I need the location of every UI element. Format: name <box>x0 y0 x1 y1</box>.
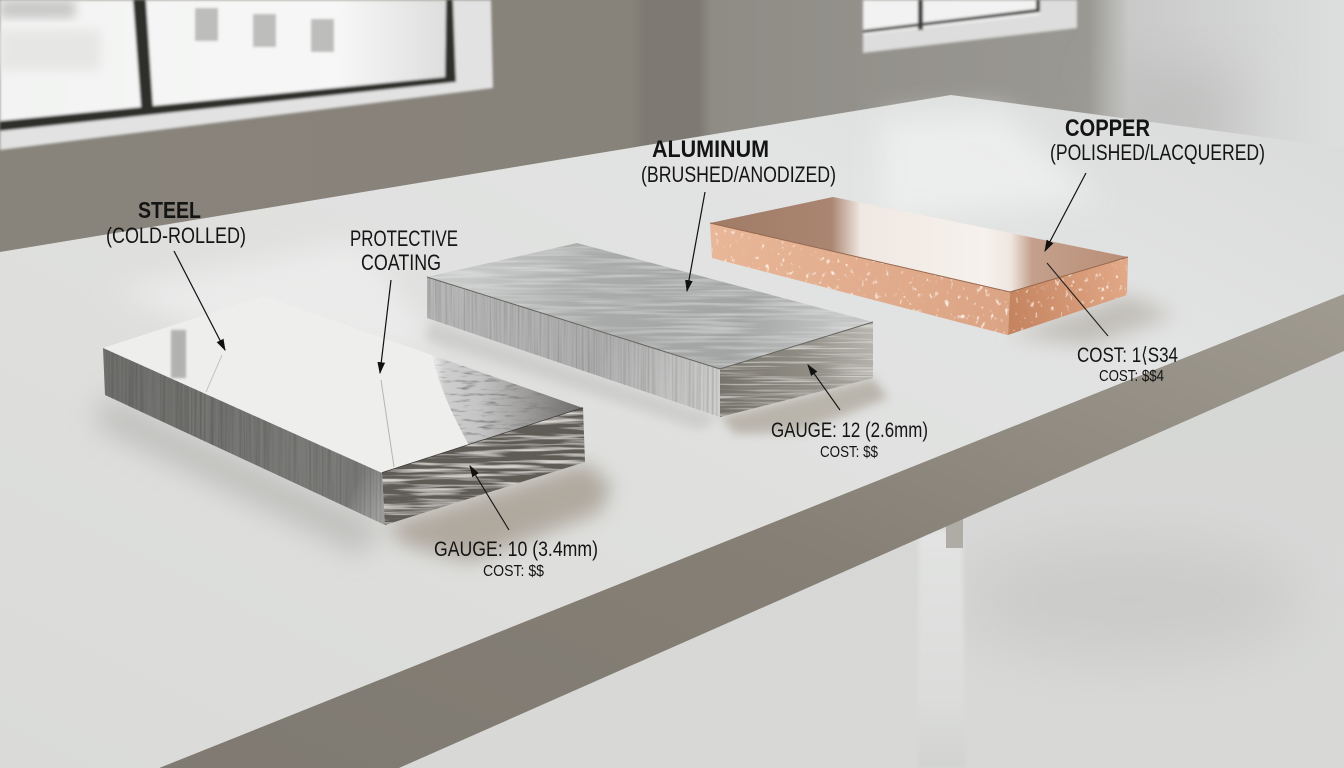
protective coating label: COATING <box>361 250 441 275</box>
aluminum gauge label <box>771 419 928 461</box>
leader line: copper cost <box>1047 263 1108 336</box>
copper shadow <box>1008 295 1175 345</box>
aluminum left face <box>427 277 720 417</box>
aluminum label: (BRUSHED/ANODIZED) <box>641 162 836 187</box>
arrow: steel <box>174 251 225 350</box>
arrow: aluminum <box>687 192 705 291</box>
protective coating label <box>350 226 458 275</box>
floor beneath table <box>0 300 1344 768</box>
steel gauge label: GAUGE: 10 (3.4mm) <box>434 538 598 561</box>
steel left face <box>103 348 385 525</box>
aluminum right face <box>720 322 873 417</box>
copper top face <box>710 197 1128 292</box>
steel gauge label: COST: $$ <box>483 563 544 580</box>
copper cost label: COST: $$4 <box>1099 368 1164 385</box>
steel label: (COLD-ROLLED) <box>106 223 246 248</box>
table front edge <box>159 294 1344 768</box>
copper cost label <box>1077 344 1178 385</box>
background room wall <box>0 0 1344 320</box>
copper left face <box>710 223 1010 335</box>
copper label: (POLISHED/LACQUERED) <box>1050 140 1265 165</box>
steel block <box>95 296 612 562</box>
copper label <box>1050 115 1265 165</box>
steel top face <box>103 296 583 473</box>
copper cost label: COST: 1⟨S34 <box>1077 344 1178 367</box>
arrow: steel gauge <box>470 466 509 530</box>
aluminum top face <box>427 243 873 369</box>
aluminum shadow <box>425 320 888 434</box>
aluminum gauge label: COST: $$ <box>820 444 878 461</box>
copper block <box>710 197 1175 345</box>
arrow: protective coating <box>380 280 391 373</box>
aluminum label: ALUMINUM <box>652 136 769 163</box>
aluminum label <box>641 136 836 187</box>
steel right face <box>382 408 585 525</box>
copper right face <box>1008 257 1128 335</box>
aluminum gauge label: GAUGE: 12 (2.6mm) <box>771 419 928 442</box>
copper label: COPPER <box>1065 115 1150 142</box>
protective coating label: PROTECTIVE <box>350 226 458 251</box>
steel label: STEEL <box>138 197 201 223</box>
steel block shadow <box>95 395 612 562</box>
left window <box>0 0 493 150</box>
right window <box>863 0 1077 53</box>
aluminum block <box>425 243 888 434</box>
table leg <box>946 510 963 548</box>
arrow: aluminum gauge <box>808 365 840 410</box>
steel gauge label <box>434 538 598 580</box>
steel label <box>106 197 246 248</box>
arrow: copper <box>1045 173 1086 251</box>
